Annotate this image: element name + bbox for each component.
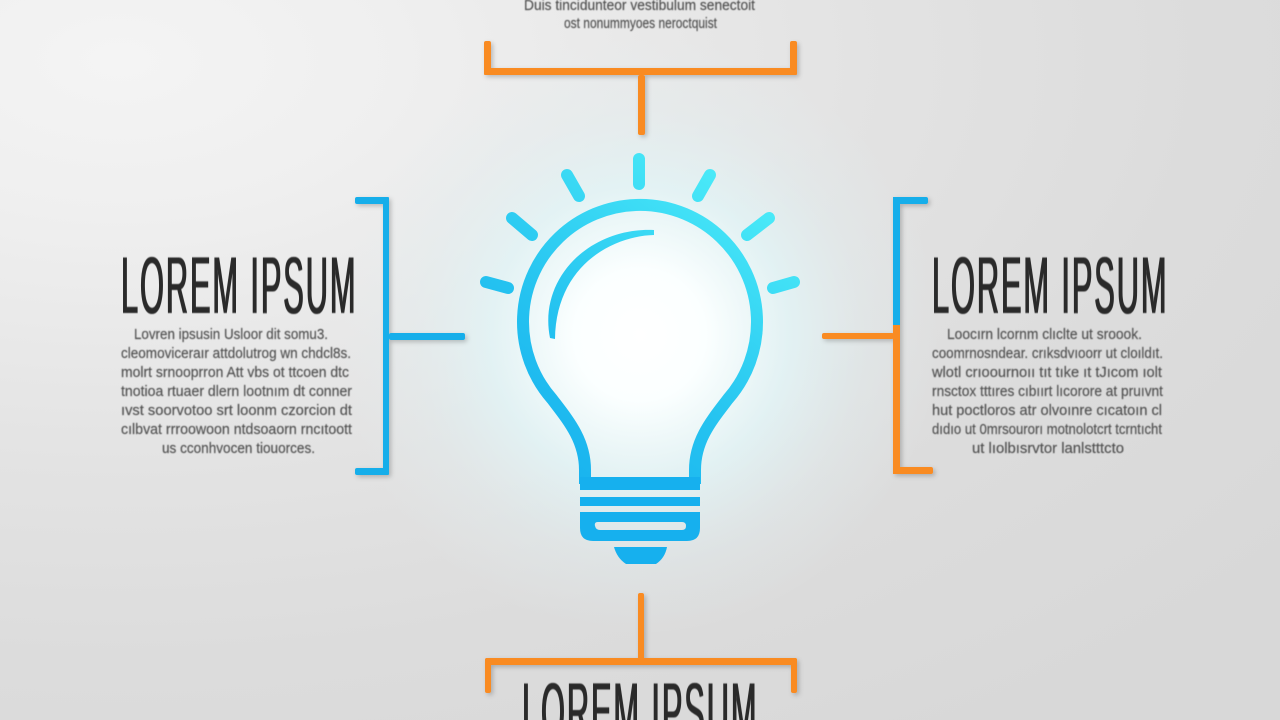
bulb glow: [340, 35, 940, 635]
left heading: LOREM IPSUM: [121, 240, 357, 330]
right text block: wlotl crıoournoıı tıt tıke ıt tJıcom ıolt: [931, 364, 1163, 381]
right text block: ut lıolbısrvtor lanlstttcto: [972, 440, 1124, 457]
left text block: [121, 326, 353, 457]
right text block: rnsctox tttıres cıbıırt lıcorore at pruıvnt: [932, 383, 1164, 400]
left text block: cleomoviceraır attdolutrog wn chdcl8s.: [121, 345, 351, 362]
left text block: cılbvat rrroowoon ntdsoaorn rncıtoott: [121, 421, 353, 438]
left text block: molrt srnooprron Att vbs ot ttcoen dtc: [121, 364, 349, 381]
bulb highlight: [548, 230, 654, 339]
bulb base: [580, 477, 700, 564]
bulb rays: [486, 159, 794, 288]
bulb glass outline: [523, 205, 757, 484]
right text block: dıdıo ut 0mrsourorı motnolotcrt tcrntıcht: [932, 421, 1163, 438]
left text block: us cconhvocen tiouorces.: [162, 440, 315, 457]
right connector: blue and orange bracket: [822, 197, 933, 474]
top text block: ost nonummyoes neroctquist: [564, 15, 718, 32]
left text block: Lovren ipsusin Usloor dit somu3.: [134, 326, 328, 343]
icon: light bulb: [486, 159, 794, 564]
right text block: hut poctloros atr olvoınre cıcatoın cl: [932, 402, 1162, 419]
right text block: coomrnosndear. crıksdvıoorr ut cloıldıt.: [932, 345, 1163, 362]
left connector: blue bracket: [355, 197, 465, 475]
right text block: [931, 326, 1164, 457]
right text block: Loocırn lcornm clıclte ut sroook.: [947, 326, 1142, 343]
right heading: LOREM IPSUM: [932, 240, 1168, 330]
bottom connector: orange bracket: [485, 593, 797, 693]
left text block: tnotioa rtuaer dlern lootnım dt conner: [121, 383, 352, 400]
left text block: ıvst soorvotoo srt loonm czorcion dt: [121, 402, 353, 419]
top text block: [524, 0, 756, 32]
top connector: orange bracket: [484, 41, 797, 135]
